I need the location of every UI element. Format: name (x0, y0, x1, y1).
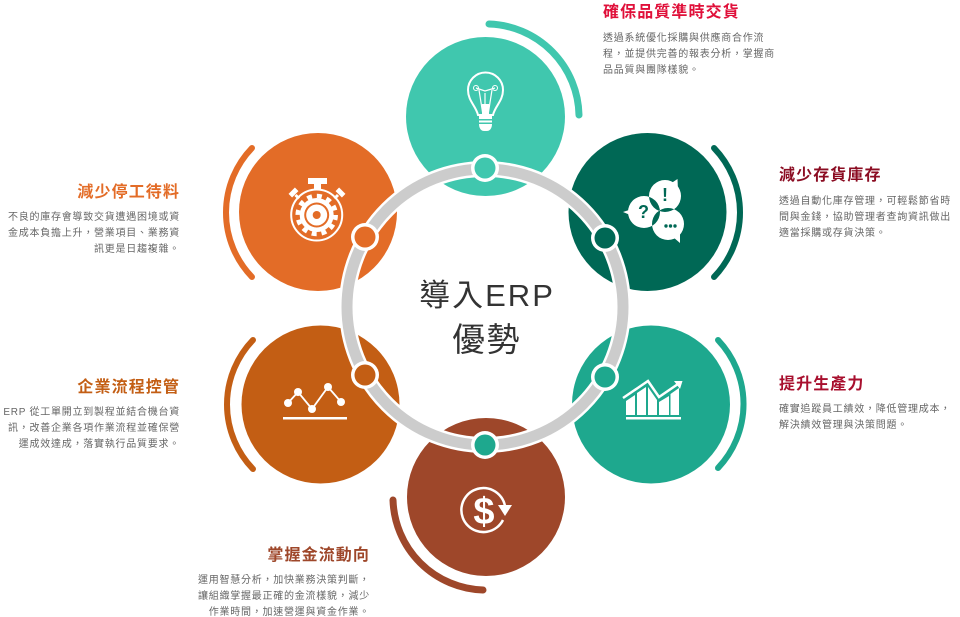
body (779, 402, 951, 431)
ring node: bottom (471, 431, 499, 459)
text: 減少存貨庫存 (779, 165, 951, 239)
body: 訊更是日趨複雜。 (94, 242, 180, 255)
body (3, 405, 180, 450)
icon: speech bubbles: ! (662, 185, 668, 205)
heading: 確保品質準時交貨 (603, 2, 740, 21)
ring node: lower left (351, 361, 379, 389)
circle: top teal (406, 24, 579, 196)
body: 適當採購或存貨決策。 (779, 226, 886, 239)
body: 運用智慧分析，加快業務決策判斷， (198, 573, 370, 586)
body: 程，並提供完善的報表分析，掌握商 (603, 47, 775, 60)
body (779, 194, 951, 239)
circle: upper right dark green (568, 133, 740, 291)
body (198, 573, 370, 617)
icon: line graph (283, 383, 347, 420)
icon: speech bubbles (623, 179, 684, 243)
icon: stopwatch gear (289, 178, 345, 240)
ring node: lower right (591, 363, 619, 391)
center title (419, 278, 555, 358)
circle: lower left dark orange (227, 326, 400, 484)
text: 企業流程控管 (3, 377, 180, 450)
body: 運成效達成，落實執行品質要求。 (19, 437, 180, 450)
center title: 導入ERP (419, 278, 555, 313)
body: ERP 從工單開立到製程並結合機台資 (3, 405, 180, 418)
text: 掌握金流動向 (198, 545, 370, 617)
body: 透過自動化庫存管理，可輕鬆節省時 (779, 194, 951, 207)
body: 品品質與團隊樣貌。 (603, 63, 700, 76)
body (603, 31, 775, 76)
text: 減少停工待料 (8, 182, 180, 255)
body: 不良的庫存會導致交貨遭遇困境或資 (8, 210, 180, 223)
icon: chart with arrow (623, 381, 682, 420)
body: 金成本負擔上升，營業項目、業務資 (8, 226, 180, 239)
body: 解決績效管理與決策問題。 (779, 418, 908, 431)
ring node: upper left (351, 223, 379, 251)
body: 讓組織掌握最正確的金流樣貌，減少 (198, 589, 370, 602)
heading: 提升生產力 (779, 374, 865, 393)
text: 確保品質準時交貨 (603, 2, 775, 76)
ring node: upper right (591, 224, 619, 252)
heading: 掌握金流動向 (267, 545, 370, 564)
body: 間與金錢，協助管理者查詢資訊做出 (779, 210, 951, 223)
ring node: top (471, 154, 499, 182)
circle: bottom brown (393, 418, 565, 590)
body: 確實追蹤員工績效，降低管理成本， (779, 402, 951, 415)
body: 訊，改善企業各項作業流程並確保營 (8, 421, 180, 434)
circle: upper left orange (226, 133, 397, 291)
heading: 減少停工待料 (77, 182, 180, 201)
central ring (347, 169, 623, 445)
center title: 優勢 (452, 321, 521, 358)
icon: dollar refresh (461, 488, 512, 533)
text: 提升生產力 (779, 374, 951, 431)
icon: light bulb (468, 72, 503, 131)
body (8, 210, 180, 255)
icon: dollar refresh: $ (473, 491, 495, 533)
icon: speech bubbles: ? (638, 202, 649, 222)
body: 透過系統優化採購與供應商合作流 (603, 31, 764, 44)
circle: lower right green (572, 326, 744, 484)
heading: 企業流程控管 (77, 377, 180, 396)
heading: 減少存貨庫存 (779, 165, 882, 184)
